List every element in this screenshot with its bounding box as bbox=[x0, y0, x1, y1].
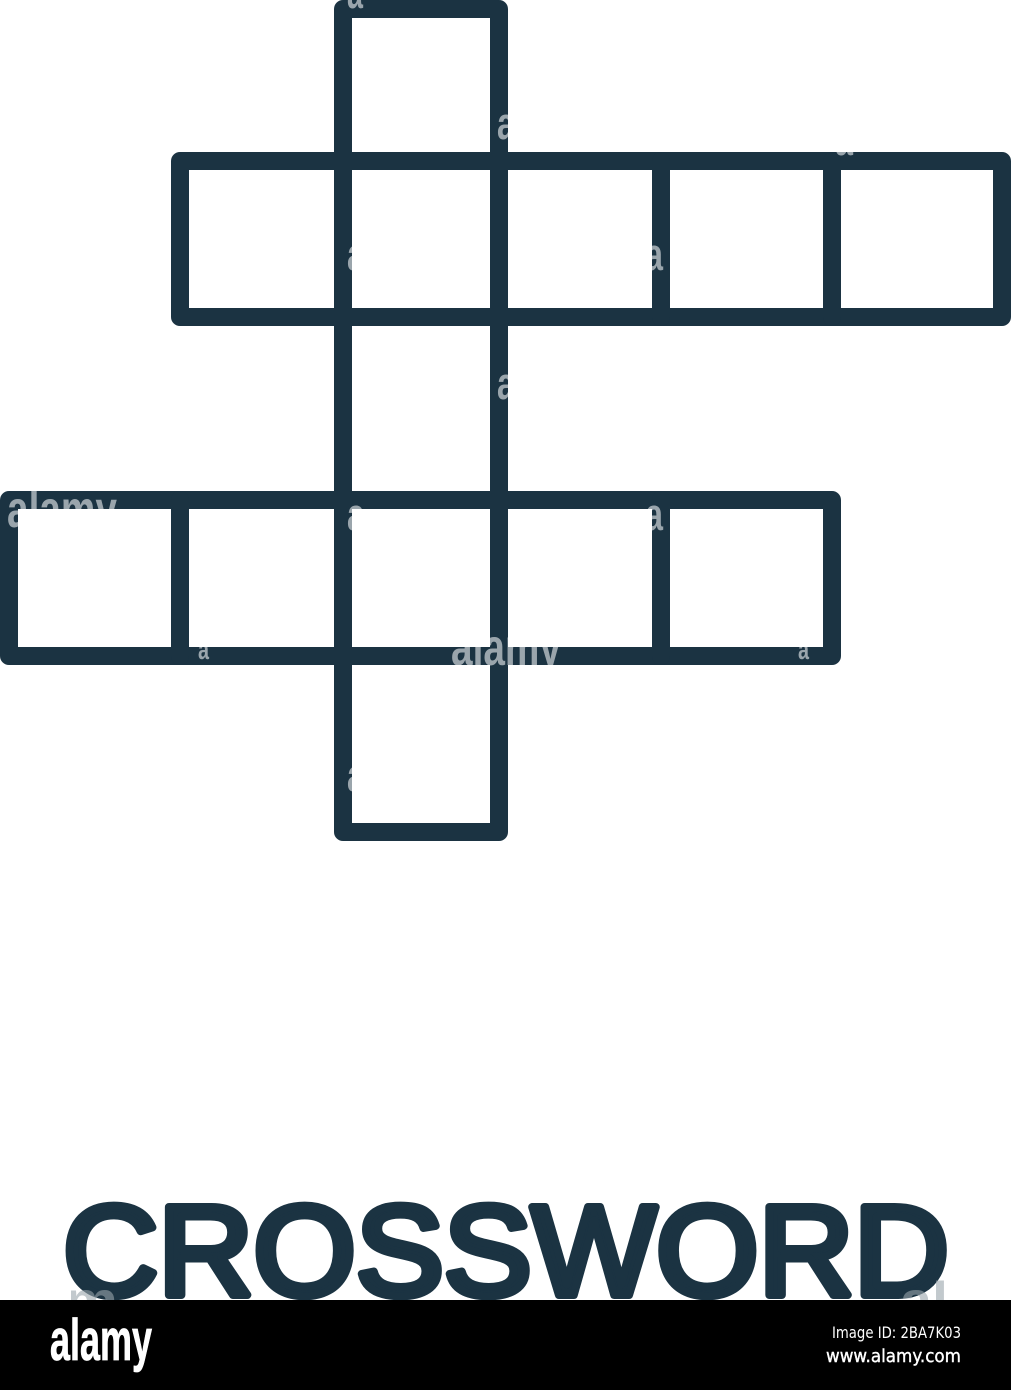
upper row cell dividers bbox=[661, 161, 832, 317]
watermark: right title fragment: al bbox=[900, 1272, 948, 1330]
watermark fragments on title bbox=[71, 1280, 944, 1300]
image id: Image ID: 2BA7K03 bbox=[832, 1323, 961, 1342]
upper horizontal word row bbox=[180, 161, 1002, 317]
watermark: a on row right: a bbox=[645, 229, 664, 280]
watermark fragments on grid bbox=[7, 0, 854, 801]
lower horizontal word row bbox=[9, 500, 832, 656]
watermark: a bottom right: a bbox=[798, 634, 809, 665]
lower row cell dividers bbox=[180, 500, 661, 656]
watermark: left title fragment: m bbox=[64, 1272, 118, 1330]
watermark: a on column: a bbox=[497, 98, 516, 149]
icon: crossword grid bbox=[9, 9, 1002, 832]
watermark: centre alamy: alamy bbox=[451, 619, 561, 677]
watermark: left alamy: alamy bbox=[7, 481, 117, 539]
watermark: a column bottom: a bbox=[347, 750, 366, 801]
website: www.alamy.com bbox=[826, 1346, 961, 1367]
watermark: a on row: a bbox=[347, 229, 366, 280]
watermark: a on column mid: a bbox=[497, 358, 516, 409]
vertical word column bbox=[343, 9, 499, 832]
footer bar bbox=[0, 1300, 1011, 1390]
watermark: a lower row: a bbox=[347, 489, 366, 540]
footer logo: alamy bbox=[50, 1308, 152, 1373]
watermark: a top edge right: a bbox=[835, 114, 854, 165]
watermark: a lower row right: a bbox=[645, 489, 664, 540]
watermark: a bottom left: a bbox=[198, 634, 209, 665]
title: CROSSWORD bbox=[63, 1180, 949, 1323]
